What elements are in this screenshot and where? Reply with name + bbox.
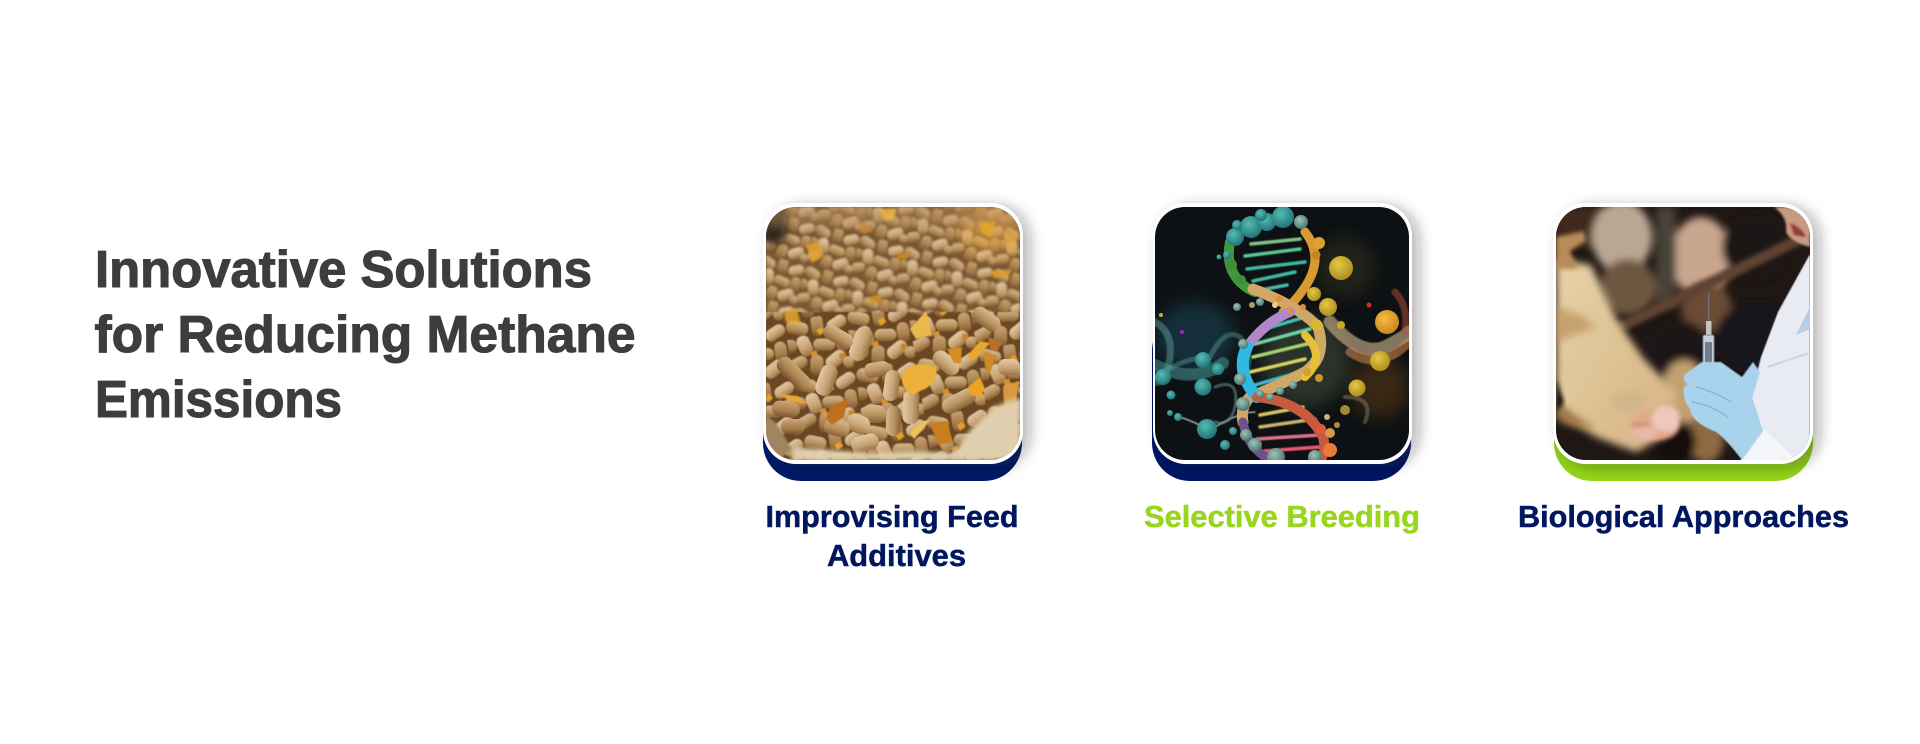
- title: Innovative Solutions: [95, 241, 592, 299]
- label: biological approaches: Biological Approaches: [1518, 499, 1849, 534]
- label: improvising feed additives: Additives: [827, 538, 966, 573]
- panel: improvising feed additives: [760, 203, 1025, 481]
- veils: [1155, 292, 1409, 429]
- face at the corner: [1774, 207, 1810, 247]
- yellow and orange balls: [1159, 237, 1399, 457]
- label: improvising feed additives: [766, 499, 1018, 573]
- large foreground pellets: [771, 304, 1020, 454]
- helix strands: [1229, 232, 1324, 460]
- white card frame: [1153, 203, 1412, 464]
- photo: feed pellets: [760, 205, 1025, 460]
- photo: cow and syringe: [1556, 201, 1810, 464]
- white card frame: [1553, 203, 1813, 464]
- lab coat: [1741, 254, 1810, 460]
- white card frame: [763, 203, 1023, 464]
- foreground cow: [1556, 259, 1676, 452]
- syringe: [1702, 293, 1714, 363]
- rungs: [1245, 239, 1320, 451]
- photo: dna helix: [1155, 206, 1410, 466]
- label: improvising feed additives: Improvising Feed: [766, 499, 1018, 534]
- gloved hand: [1684, 362, 1763, 460]
- title: Emissions: [95, 371, 342, 429]
- title: [94, 241, 636, 429]
- card base: navy: [763, 313, 1022, 481]
- label: selective breeding: Selective Breeding: [1144, 499, 1420, 534]
- corn flakes in the foreground: [778, 311, 1020, 445]
- panel: selective breeding: [1152, 203, 1412, 481]
- card base: navy: [1152, 313, 1411, 481]
- teal beads: [1155, 206, 1294, 450]
- burlap sack: [766, 415, 792, 460]
- card base: green: [1554, 313, 1813, 481]
- title: for Reducing Methane: [94, 306, 636, 364]
- fence rail: [1614, 239, 1800, 330]
- corn flakes in the upper field: [784, 209, 1016, 324]
- panel: biological approaches: [1553, 201, 1813, 481]
